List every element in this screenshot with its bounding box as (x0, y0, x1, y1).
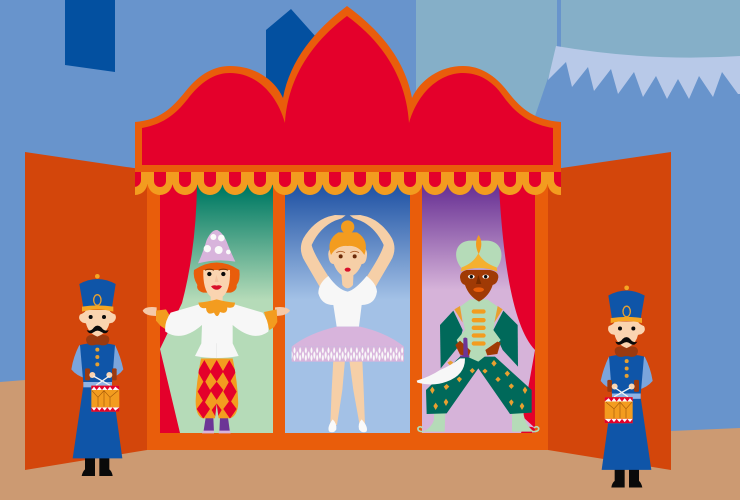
canopy outline (135, 6, 561, 172)
face (328, 240, 367, 277)
tutu (292, 327, 404, 347)
hair (194, 262, 240, 293)
hat (198, 230, 235, 263)
ground (0, 380, 740, 500)
arms (301, 215, 346, 287)
lips (345, 268, 351, 272)
shirt (165, 303, 268, 358)
hands (143, 307, 157, 316)
jacket (457, 299, 501, 362)
cuffs (156, 309, 170, 330)
harlequin trousers (196, 358, 238, 418)
figure: sultan (417, 235, 539, 432)
right door (548, 152, 671, 470)
eyes (207, 272, 211, 276)
bodice (318, 276, 377, 327)
trousers (426, 357, 532, 414)
eyes (468, 275, 475, 279)
panel: sultan backdrop (422, 185, 535, 433)
right drummer (601, 285, 653, 487)
left door (25, 152, 147, 470)
bunting (548, 46, 740, 99)
background: centre tower window (266, 9, 316, 110)
hair (329, 232, 366, 255)
shoes (328, 419, 336, 432)
turban (456, 241, 501, 268)
hands (455, 341, 471, 357)
sabre (417, 358, 465, 384)
shoulder accents (454, 306, 463, 323)
left curtain (160, 185, 197, 433)
stage frame (147, 170, 548, 450)
jacket frogging (472, 309, 486, 314)
eyes (339, 254, 343, 258)
lips (211, 285, 222, 290)
trouser diamonds (430, 360, 527, 410)
canopy red (142, 16, 553, 165)
panel: ballerina backdrop (285, 185, 410, 433)
background: left window (65, 0, 115, 72)
panel: clown backdrop (160, 185, 273, 433)
figure: clown (143, 230, 290, 433)
collar (198, 299, 235, 316)
right curtain (499, 185, 535, 433)
sleeves (440, 311, 463, 368)
feet (423, 413, 445, 432)
background: pale teal sky panel (416, 0, 740, 190)
left drummer (71, 274, 123, 476)
shirt seam (216, 343, 218, 358)
figure: ballerina (292, 215, 404, 432)
neck (341, 270, 354, 288)
neck and face (211, 293, 223, 303)
lips (473, 287, 484, 292)
valance scallops (135, 172, 561, 195)
legs (330, 360, 345, 425)
face (460, 270, 498, 302)
background: tower stripe (557, 0, 561, 47)
boots (203, 418, 230, 433)
background: right building (500, 62, 740, 300)
